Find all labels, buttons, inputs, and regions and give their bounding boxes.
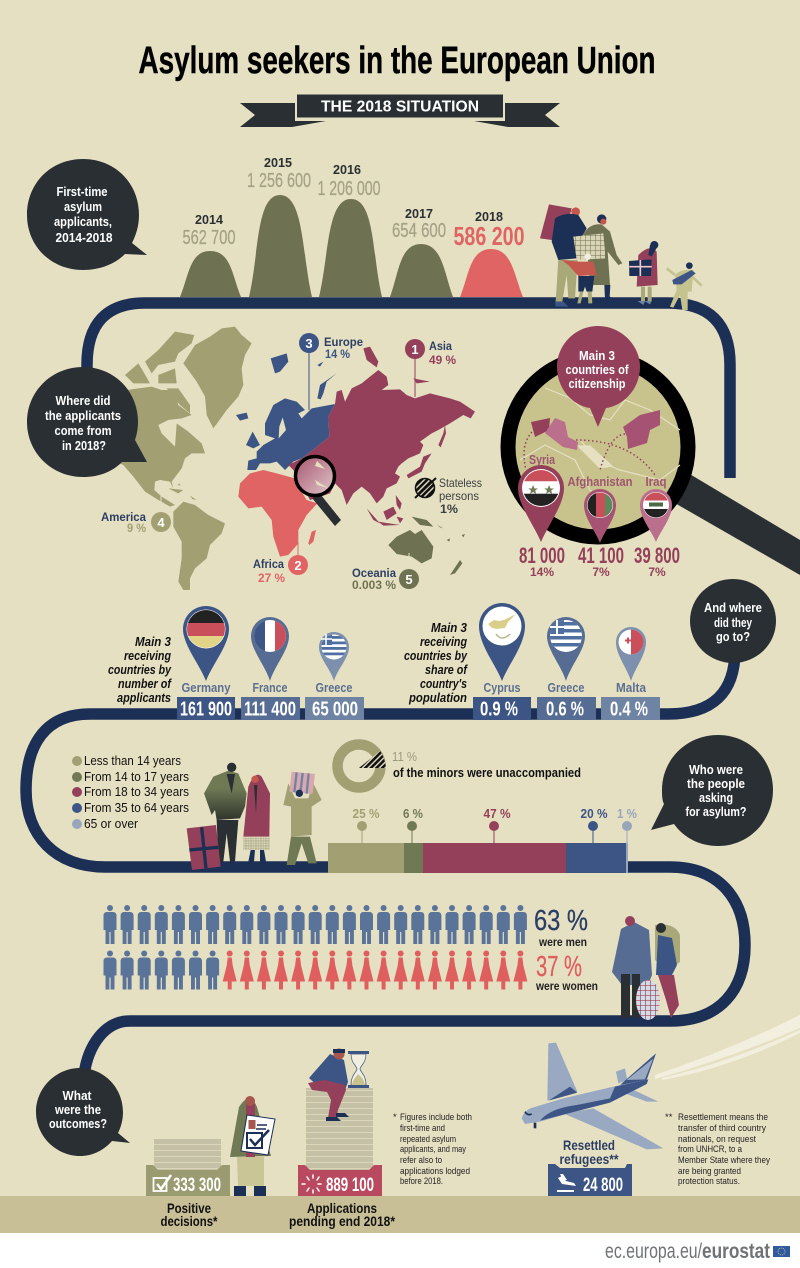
bubble: what were the outcomes: outcomes? — [49, 1116, 107, 1131]
illustration: family with suitcase — [187, 763, 322, 870]
footer background — [0, 1233, 800, 1268]
footnote: resettlement — [665, 1112, 770, 1187]
icon: loading spinner — [302, 1175, 321, 1193]
donut: unaccompanied minors — [338, 744, 386, 788]
pin: France — [251, 617, 289, 681]
legend: age groups: From 14 to 17 years — [84, 769, 189, 784]
value: Iraq: 39 800 — [634, 543, 680, 568]
contrail — [655, 1015, 800, 1080]
hill 2017 — [390, 244, 453, 297]
note: receiving countries by number: receiving — [124, 648, 171, 663]
paper stack: pending — [306, 1088, 373, 1172]
bubble: what were the outcomes — [36, 1068, 130, 1156]
bubble: first-time applicants: First-time — [56, 184, 108, 199]
map label: America — [101, 480, 171, 535]
country label: Greece: Greece — [316, 680, 352, 695]
text: 11 percent unaccompanied: of the minors were unaccompanied — [393, 765, 581, 780]
callout: main 3 countries: Main 3 — [579, 348, 615, 363]
map label: America: 4 — [157, 515, 165, 530]
tray: resettled refugees: 24 800 — [583, 1175, 623, 1196]
map label: Oceania — [352, 553, 419, 592]
label 2017: 2017 — [405, 206, 433, 221]
country label: Malta: Malta — [616, 680, 647, 695]
bubble: first-time applicants: asylum — [64, 199, 102, 214]
small magnifier — [296, 456, 341, 526]
bottom ground band — [0, 1196, 800, 1233]
stacked bar: age distribution: 47 % — [484, 806, 511, 821]
footnote: resettlement: are being granted — [678, 1166, 741, 1177]
icon: EU flag — [773, 1246, 790, 1257]
hill 2018 — [460, 249, 523, 297]
note: receiving countries by number: number of — [118, 676, 172, 691]
label: Iraq: Iraq — [646, 475, 666, 489]
pin: Germany — [183, 606, 229, 681]
stat: men: 63 % — [534, 905, 588, 937]
note: receiving countries by share: Main 3 — [431, 620, 468, 635]
bubble: where did the applicants come from: the applicants — [45, 408, 121, 423]
text: 11 percent unaccompanied: 11 % — [392, 749, 417, 764]
dotted routes — [524, 432, 655, 475]
footnote: resettlement: from UNHCR, to a — [678, 1144, 743, 1155]
stacked bar: age distribution: 20 % — [580, 806, 608, 821]
tray: pending applications: 889 100 — [326, 1175, 374, 1196]
note: receiving countries by share: share of — [425, 662, 468, 677]
value 2016: 1 206 000 — [318, 178, 380, 200]
tray: positive decisions: 333 300 — [173, 1175, 221, 1196]
label: resettled refugees: refugees** — [560, 1151, 619, 1167]
stateless persons: Stateless — [439, 476, 482, 490]
footnote: figures: first-time and — [400, 1123, 445, 1134]
map label: Oceania: 5 — [405, 572, 413, 587]
map label: Oceania: Oceania — [352, 566, 396, 580]
note: receiving countries by number: Main 3 — [135, 634, 172, 649]
stateless persons: persons — [439, 489, 479, 503]
label: resettled refugees: Resettled — [563, 1137, 615, 1153]
label: positive decisions: Positive — [167, 1200, 211, 1216]
region: Oceania — [388, 517, 465, 575]
Syria shape — [531, 418, 550, 437]
note: receiving countries by share: population — [408, 690, 467, 705]
map label: Africa: 2 — [294, 558, 302, 573]
region: Asia — [288, 347, 475, 526]
text: 11 percent unaccompanied — [392, 749, 581, 780]
map label: America: 9 % — [127, 521, 146, 535]
value: Syria: 81 000 — [519, 543, 565, 568]
label 2018: 2018 — [475, 209, 503, 224]
country label: Germany: Germany — [182, 680, 231, 695]
map label: Africa: 27 % — [258, 571, 285, 585]
note: receiving countries by share: country's — [420, 676, 467, 691]
bubble: first-time applicants: applicants, — [54, 214, 112, 229]
tray: pending applications — [298, 1165, 382, 1196]
legend: age groups: From 18 to 34 years — [84, 784, 189, 799]
value box: Greece: 65 000 — [312, 698, 358, 720]
footer: eurostat link — [605, 1240, 790, 1263]
map label: Europe — [299, 333, 363, 410]
value: Syria — [519, 543, 565, 579]
value: Syria: 14% — [530, 565, 554, 579]
stateless persons — [415, 476, 482, 516]
tray: positive decisions — [146, 1165, 230, 1196]
value: Iraq: 7% — [648, 565, 666, 579]
label 2014: 2014 — [195, 212, 224, 227]
footnote: figures: refer also to — [400, 1155, 442, 1166]
bubble: where did the applicants come from: come from — [54, 423, 112, 438]
callout: main 3 countries — [557, 326, 640, 427]
bubble: where did the applicants come from: Where did — [56, 393, 111, 408]
legend: age groups: Less than 14 years — [84, 753, 181, 768]
banner: the 2018 situation: THE 2018 SITUATION — [321, 98, 479, 116]
hill 2016 — [319, 199, 382, 297]
pin: Iraq — [640, 489, 672, 542]
document — [241, 1115, 275, 1155]
pin: Syria — [518, 465, 564, 542]
value box: Germany: 161 900 — [180, 698, 232, 720]
stat: men — [534, 905, 588, 949]
map label: Europe: Europe — [324, 335, 363, 349]
bubble: where did the applicants come from: in 2018? — [62, 438, 106, 453]
value 2014: 562 700 — [182, 227, 236, 249]
paper stack: positive — [154, 1139, 221, 1172]
icon: check box — [154, 1175, 171, 1191]
bubble: what were the outcomes: What — [62, 1088, 92, 1103]
value box: Greece share: 0.6 % — [546, 698, 584, 720]
legend: age groups — [72, 753, 189, 831]
region: Africa — [238, 470, 317, 557]
bubble: who were the people: the people — [687, 776, 745, 791]
pin: Greece — [319, 632, 349, 681]
map label: Asia: 49 % — [429, 353, 456, 367]
bubble: and where did they go — [690, 579, 776, 663]
value: Afghanistan: 41 100 — [578, 543, 624, 568]
row of men — [104, 905, 527, 990]
bubble: where did the applicants come from — [27, 367, 147, 477]
footnote: figures: repeated asylum — [400, 1134, 456, 1145]
footnote: figures: before 2018. — [400, 1176, 443, 1187]
value: Iraq — [634, 543, 680, 579]
map label: Asia: 1 — [411, 342, 419, 357]
value 2018: 586 200 — [454, 221, 524, 251]
illustration: couple with bag — [612, 916, 680, 1024]
region: Europe — [236, 353, 337, 470]
stat: women: 37 % — [536, 951, 582, 983]
bubble: first-time applicants: 2014-2018 — [56, 230, 112, 245]
footnote: resettlement: transfer of third country — [678, 1123, 766, 1134]
map label: Europe: 3 — [305, 336, 313, 351]
icon: hourglass — [348, 1051, 369, 1088]
illustration: waiting man with hourglass — [308, 1048, 369, 1121]
value 2017: 654 600 — [392, 220, 446, 242]
note: receiving countries by share: countries by — [404, 648, 468, 663]
bubble: who were the people: asking — [699, 790, 733, 805]
map label: Oceania: 0.003 % — [352, 578, 396, 592]
bubble: first-time applicants — [27, 159, 147, 270]
stateless persons: 1% — [440, 502, 458, 516]
note: receiving countries by number: countries by — [108, 662, 172, 677]
label: Syria: Syria — [529, 453, 556, 467]
footnote: figures: Figures include both — [400, 1112, 472, 1123]
value 2015: 1 256 600 — [247, 170, 311, 192]
illustration: family walking — [540, 204, 702, 310]
label 2016: 2016 — [333, 162, 361, 177]
magnifier lens — [508, 357, 688, 537]
pin: Afghanistan — [584, 489, 616, 543]
bubble: and where did they go: And where — [704, 600, 762, 615]
big magnifier: main 3 countries of citizenship — [508, 326, 800, 579]
value: Afghanistan: 7% — [592, 565, 610, 579]
footnote: figures: applications lodged — [400, 1166, 470, 1177]
hill 2015 — [249, 195, 312, 297]
bubble: who were the people — [651, 735, 773, 846]
footnote: resettlement: ** — [665, 1112, 673, 1123]
stat: men: were men — [538, 935, 587, 949]
map label: Africa: Africa — [253, 557, 284, 571]
value box: Germany — [177, 697, 235, 720]
footnote: resettlement: nationals, on request — [678, 1134, 756, 1145]
map label: Asia: Asia — [429, 339, 452, 353]
value: Afghanistan — [578, 543, 624, 579]
timeline path — [26, 303, 745, 1075]
magnifier handle — [673, 473, 800, 575]
stacked bar: age distribution: 1 % — [617, 806, 637, 821]
callout: main 3 countries: countries of — [566, 362, 629, 377]
country label: Greece share: Greece — [548, 680, 584, 695]
label: positive decisions — [160, 1200, 218, 1229]
label: applications pending — [289, 1200, 395, 1229]
value box: Cyprus: 0.9 % — [480, 698, 518, 720]
pictogram: men and women — [104, 905, 527, 990]
footer: eurostat link: ec.europa.eu/ — [605, 1240, 702, 1263]
illustration: airplane — [522, 1043, 663, 1149]
label: resettled refugees — [560, 1137, 619, 1167]
value box: Malta: 0.4 % — [610, 698, 648, 720]
label: applications pending: pending end 2018* — [289, 1213, 395, 1229]
footnote: resettlement: protection status. — [678, 1176, 740, 1187]
footnote: resettlement: Resettlement means the — [678, 1112, 768, 1123]
footnote: figures — [393, 1112, 472, 1187]
note: receiving countries by share — [404, 620, 468, 705]
footnote: figures: applicants, and may — [400, 1144, 466, 1155]
value box: France: 111 400 — [244, 698, 296, 720]
map label: Europe: 14 % — [325, 347, 350, 361]
label: positive decisions: decisions* — [160, 1213, 218, 1229]
note: receiving countries by number: applicants — [117, 690, 171, 705]
tray: resettled refugees — [548, 1164, 632, 1196]
icon: stateless — [415, 478, 436, 498]
label: Afghanistan: Afghanistan — [568, 475, 632, 489]
country label: Cyprus: Cyprus — [484, 680, 520, 695]
stacked bar: age distribution: 6 % — [403, 806, 423, 821]
bubble: who were the people: Who were — [689, 762, 743, 777]
bubble: and where did they go: did they — [714, 615, 753, 630]
map label: Asia — [405, 339, 456, 397]
row of women — [223, 950, 527, 990]
illustration: woman with document — [230, 1096, 275, 1196]
stat: women: were women — [535, 979, 598, 993]
banner: the 2018 situation — [240, 94, 560, 127]
chart: first-time applicants hills — [180, 155, 524, 297]
note: receiving countries by share: receiving — [420, 634, 467, 649]
map label: Africa — [253, 543, 308, 585]
world map — [108, 327, 475, 590]
country label: France: France — [252, 680, 288, 695]
map label: America: America — [101, 510, 146, 524]
pin: Cyprus — [479, 603, 525, 681]
stacked bar: age distribution — [328, 806, 637, 873]
footer: eurostat link: eurostat — [702, 1240, 770, 1263]
note: receiving countries by number — [108, 634, 172, 705]
label 2015: 2015 — [264, 155, 292, 170]
legend: age groups: 65 or over — [84, 816, 139, 831]
icon: landing plane — [557, 1174, 576, 1192]
pin: Greece share — [547, 617, 585, 681]
hill 2014 — [180, 251, 241, 297]
bubble: who were the people: for asylum? — [686, 804, 747, 819]
Afghanistan shape — [623, 410, 660, 449]
label: applications pending: Applications — [307, 1200, 377, 1216]
footnote: resettlement: Member State where they — [678, 1155, 770, 1166]
Iraq shape — [545, 418, 578, 450]
footnote: figures: * — [393, 1112, 397, 1123]
bubble: and where did they go: go to? — [716, 629, 750, 644]
bubble: what were the outcomes: were the — [54, 1102, 101, 1117]
callout: main 3 countries: citizenship — [568, 376, 626, 391]
stacked bar: age distribution: 25 % — [352, 806, 380, 821]
pin: Malta — [616, 627, 646, 681]
legend: age groups: From 35 to 64 years — [84, 800, 189, 815]
region: America — [108, 327, 252, 590]
